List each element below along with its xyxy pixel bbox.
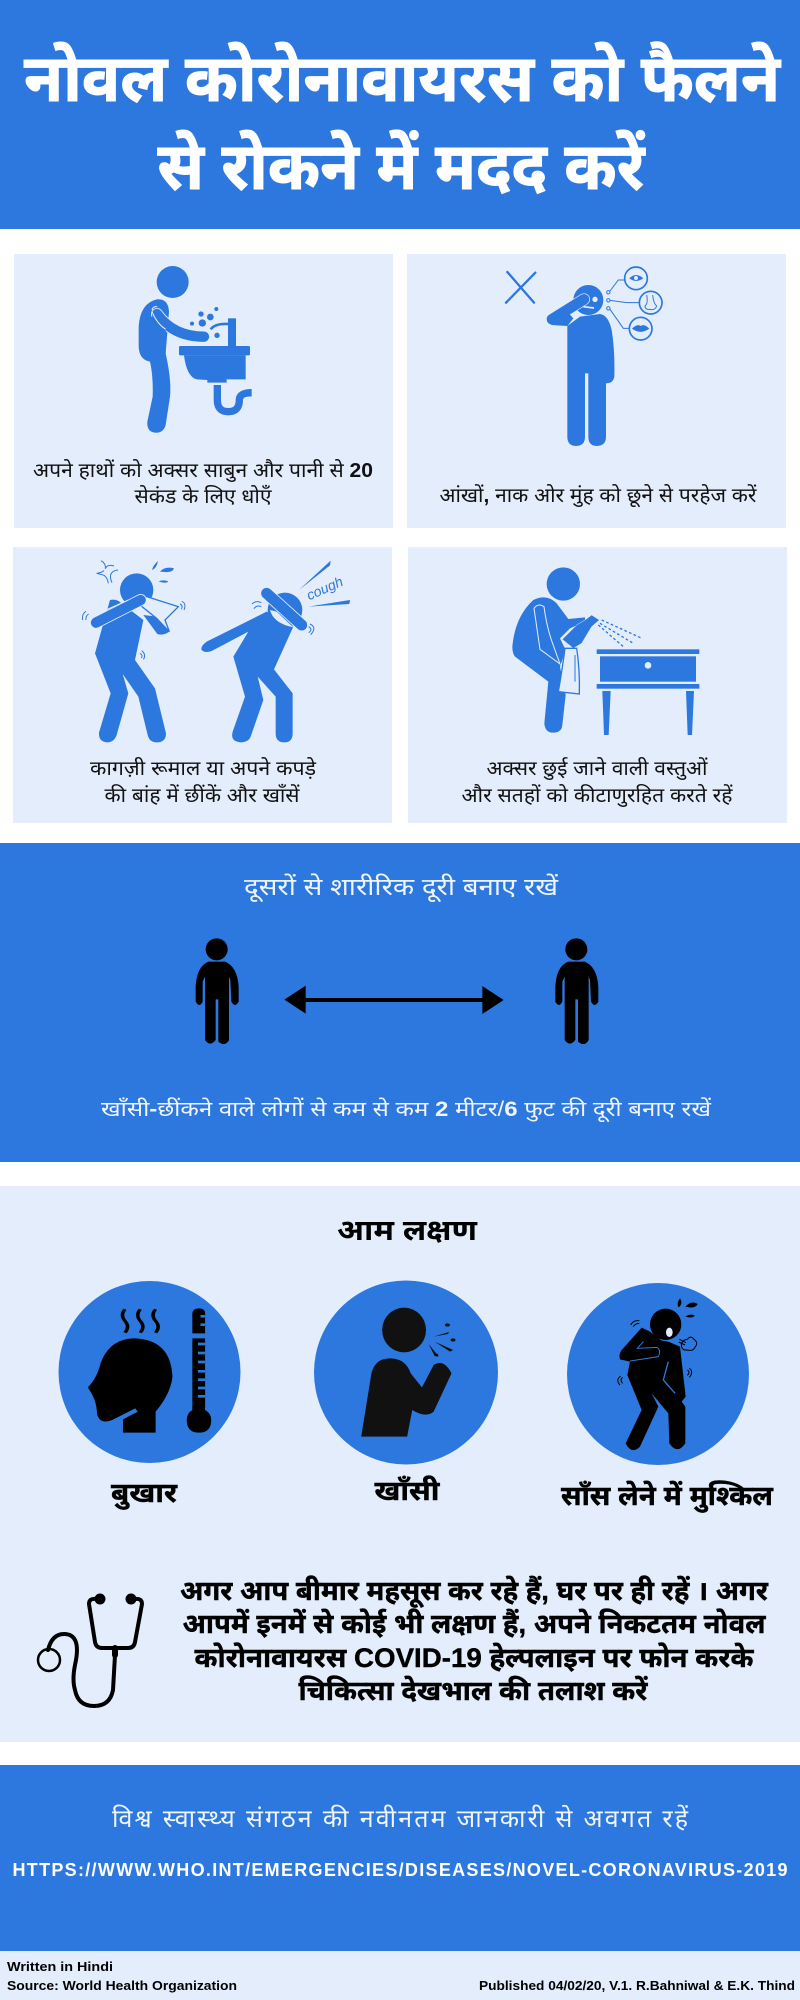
stay home advice: आपमें इनमें से कोई भी लक्षण हैं, अपने निकटतम नोवल	[182, 1608, 767, 1639]
icon: person touching eye with face diagram	[506, 267, 662, 446]
heading: physical distance: दूसरों से शारीरिक दूरी बनाए रखें	[244, 873, 558, 903]
icon: person washing hands at sink	[139, 266, 252, 433]
caption: disinfect surfaces	[462, 756, 733, 808]
panel: cover sneezes and coughs	[13, 547, 392, 823]
icon: people coughing into elbow and tissue	[82, 561, 350, 742]
panel: disinfect surfaces	[408, 547, 787, 823]
icon: stethoscope	[38, 1596, 142, 1706]
WHO sentence: विश्व स्वास्थ्य संगठन की नवीनतम जानकारी से अवगत रहें	[112, 1803, 689, 1833]
footer: credits: Source: World Health Organization	[7, 1978, 237, 1993]
WHO link: HTTPS://WWW.WHO.INT/EMERGENCIES/DISEASES/NOVEL-CORONAVIRUS-2019	[12, 1860, 788, 1880]
stay home advice: चिकित्सा देखभाल की तलाश करें	[298, 1675, 649, 1706]
icon: fever	[58, 1281, 240, 1463]
footer: credits: Written in Hindi	[7, 1959, 113, 1974]
stay home advice: अगर आप बीमार महसूस कर रहे हैं, घर पर ही रहें । अगर	[180, 1575, 769, 1608]
caption: wash hands	[33, 458, 373, 508]
stay home advice: कोरोनावायरस COVID-19 हेल्पलाइन पर फोन करके	[194, 1642, 754, 1673]
icon: difficulty breathing	[567, 1283, 749, 1465]
heading: common symptoms: आम लक्षण	[337, 1215, 478, 1247]
footer: credits: Published 04/02/20, V.1. R.Bahniwal & E.K. Thind	[479, 1978, 795, 1993]
panel: do not touch face	[407, 254, 786, 528]
caption: cover sneezes and coughs	[90, 756, 316, 807]
caption: disinfect surfaces: और सतहों को कीटाणुरहित करते रहें	[462, 783, 733, 808]
title banner: से रोकने में मदद करें	[158, 129, 646, 203]
label: difficulty breathing: साँस लेने में मुश्किल	[561, 1480, 774, 1512]
footer: credits	[0, 1951, 800, 2000]
icon: cough	[314, 1280, 498, 1464]
stay home advice	[180, 1575, 769, 1706]
panel: common symptoms	[0, 1186, 800, 1742]
caption: cover sneezes and coughs: की बांह में छींकें और खाँसें	[104, 783, 300, 807]
label: fever: बुखार	[111, 1478, 178, 1509]
title banner	[0, 0, 800, 229]
panel: wash hands	[14, 254, 393, 528]
caption: cover sneezes and coughs: कागज़ी रूमाल या अपने कपड़े	[90, 756, 316, 780]
icon: person spraying table	[512, 567, 699, 735]
distance instruction: खाँसी -छींकने वाले लोगों से कम से कम 2 मीटर/ 6 फुट की दूरी बनाए रखें	[101, 1097, 712, 1123]
label: cough: खाँसी	[374, 1475, 441, 1506]
panel: WHO updates	[0, 1765, 800, 1951]
icon: two people with distance arrow	[196, 938, 598, 1044]
caption: wash hands: अपने हाथों को अक्सर साबुन और पानी से 20	[33, 458, 373, 483]
title banner: नोवल कोरोनावायरस को फैलने	[24, 41, 781, 115]
caption: do not touch face: आंखों, नाक ओर मुंह को छूने से परहेज करें	[440, 483, 757, 508]
panel: physical distance	[0, 843, 800, 1162]
icon: people coughing into elbow and tissue: cough	[304, 573, 345, 603]
caption: wash hands: सेकंड के लिए धोएँ	[134, 484, 272, 508]
caption: disinfect surfaces: अक्सर छुई जाने वाली वस्तुओं	[486, 756, 708, 781]
